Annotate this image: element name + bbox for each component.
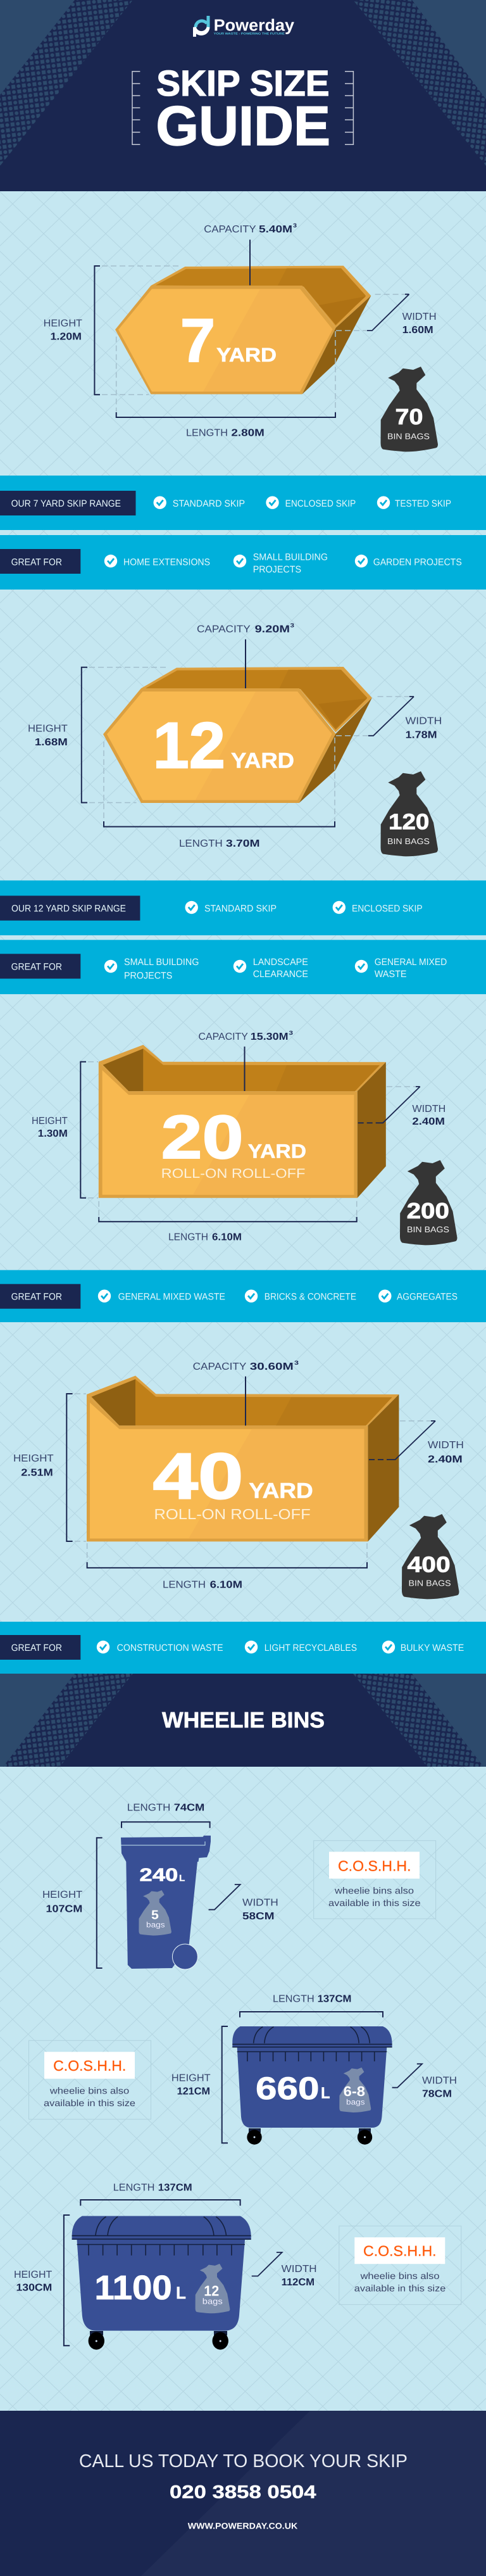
item: home extensions: HOME EXTENSIONS [123,557,210,568]
title [156,63,330,157]
height dimension: 2.51M [21,1468,53,1478]
length dimension [122,1802,210,1828]
panel: 7 yard skip [44,222,438,451]
item: landscape clearance [234,957,308,980]
item: standard skip [153,496,245,509]
icon: bin bag 120: 120 [389,810,429,835]
callout: COSHH: wheelie bins also [49,2087,129,2097]
skip size number: YARD [248,1140,306,1162]
icon: bag 12 bags [196,2264,230,2313]
phone number: 020 3858 0504 [170,2482,316,2503]
width dimension [209,1885,278,1922]
range label: OUR 7 YARD SKIP RANGE [11,498,121,509]
capacity label: CAPACITY [204,224,256,235]
width dimension: 58CM [242,1911,275,1922]
icon: bag 5 bags: bags [146,1920,165,1929]
item: enclosed skip: ENCLOSED SKIP [285,498,356,509]
item: tested skip: TESTED SKIP [395,498,451,509]
logo [195,15,295,37]
item: general mixed waste [355,957,447,980]
callout: COSHH: available in this size [328,1898,421,1909]
skip size number: ROLL-ON ROLL-OFF [161,1166,305,1181]
illustration: 1100 litre bin [72,2216,251,2350]
width dimension: 78CM [422,2088,452,2099]
height dimension: HEIGHT [14,2270,53,2280]
item: light recyclables: LIGHT RECYCLABLES [265,1643,357,1653]
length dimension: LENGTH [168,1232,208,1243]
capacity label: 3 [293,222,297,229]
icon: bin bag 70: BIN BAGS [387,432,430,441]
length dimension: 6.10M [212,1232,242,1243]
panel: 240 litre bin [42,1802,436,1969]
item: garden projects [355,555,462,568]
panel: 20 yard skip [32,1030,457,1245]
logo: Powerday [214,15,295,34]
width dimension [392,2064,457,2099]
item: small building projects: SMALL BUILDING [124,957,199,968]
capacity label: 30.60M [250,1361,294,1372]
panel: 1100 litre bin [14,2182,461,2350]
height dimension: 1.30M [38,1128,68,1139]
capacity label: 9.20M [255,624,290,635]
skip size number: YARD [216,344,277,366]
item: enclosed skip [333,901,423,914]
width dimension: WIDTH [412,1104,446,1114]
icon: bin bag 400: 400 [408,1553,451,1577]
range label [0,895,140,921]
great for label: GREAT FOR [11,962,62,973]
height dimension: HEIGHT [32,1116,68,1127]
illustration: 20 yard skip [99,1045,386,1198]
illustration: 240 litre bin [121,1836,211,1969]
icon: bin bag 400 [402,1514,459,1599]
item: bulky waste [382,1641,464,1653]
item: landscape clearance: LANDSCAPE [253,957,308,968]
capacity label: 3 [290,622,294,628]
width dimension: WIDTH [282,2264,317,2275]
item: general mixed waste: WASTE [375,969,407,980]
bar: 7 yard great for [0,535,486,590]
item: bulky waste: BULKY WASTE [401,1643,464,1653]
height dimension: HEIGHT [44,319,82,329]
callout: COSHH: available in this size [44,2099,135,2109]
callout: COSHH [339,2226,461,2304]
icon: bag 6-8 bags [339,2068,371,2112]
panel: header [0,0,486,191]
bar: 12 yard skip range [0,880,486,935]
icon: bag 6-8 bags: bags [346,2097,364,2106]
title: SKIP SIZE [156,63,330,104]
item: bricks and concrete [245,1289,356,1303]
bar: 40 yard great for [0,1622,486,1674]
great for label [0,1635,80,1660]
length dimension: LENGTH [113,2182,154,2193]
callout: COSHH: available in this size [354,2284,446,2294]
height dimension: 1.68M [35,737,68,748]
height dimension: 130CM [16,2283,52,2294]
illustration: 7 yard skip [115,266,371,394]
length dimension: LENGTH [163,1580,206,1591]
width dimension: 1.78M [406,729,437,741]
length dimension [116,331,335,438]
length dimension [80,2182,240,2206]
wheels [247,2128,372,2145]
item: standard skip [185,901,277,914]
panel: 660 litre bin [29,1994,457,2145]
length dimension: LENGTH [186,428,228,438]
length dimension: 2.80M [231,428,265,438]
item: landscape clearance: CLEARANCE [253,969,308,980]
capacity label [199,1030,293,1042]
height dimension [32,1062,98,1198]
callout: COSHH [29,2040,151,2119]
length dimension: 137CM [318,1994,351,2005]
height dimension: HEIGHT [13,1453,54,1464]
bar: 7 yard skip range [0,476,486,530]
length dimension: LENGTH [179,838,223,849]
capacity line [245,640,246,688]
item: small building projects: PROJECTS [124,970,172,982]
panel: 40 yard skip [13,1360,464,1599]
width dimension [336,697,442,741]
capacity text [139,1866,185,1886]
width dimension: 1.60M [402,325,433,336]
item: construction waste [97,1641,223,1653]
icon: bin bag 200: BIN BAGS [407,1225,449,1234]
skip size number: YARD [231,748,294,773]
great for label: GREAT FOR [11,1643,62,1653]
skip size number [161,1102,306,1181]
length dimension [240,1994,383,2017]
callout: COSHH: C.O.S.H.H. [363,2243,437,2259]
capacity text: L [176,2283,186,2302]
icon: bag 12 bags: 12 [204,2282,219,2299]
capacity text: 1100 [94,2269,172,2307]
skip size number: YARD [249,1479,313,1503]
icon: bin bag 70: 70 [395,405,423,429]
great for label [0,1284,80,1309]
callout: COSHH: C.O.S.H.H. [338,1857,411,1874]
callout: COSHH [314,1841,436,1919]
capacity label: 3 [294,1360,299,1366]
width dimension [336,294,437,336]
panel: footer [0,2411,486,2576]
icon: bag 5 bags: 5 [151,1909,159,1923]
height dimension: 1.20M [51,332,82,343]
item: bricks and concrete: BRICKS & CONCRETE [265,1292,356,1303]
callout: COSHH: C.O.S.H.H. [53,2057,126,2074]
width dimension [369,1421,464,1465]
width dimension: 112CM [282,2277,315,2288]
height dimension: 107CM [46,1904,82,1914]
icon: bin bag 70 [381,367,438,451]
icon: bin bag 200: 200 [407,1199,449,1223]
bar: 12 yard great for [0,940,486,994]
item: small building projects: PROJECTS [253,564,301,575]
height dimension [42,1838,103,1968]
width dimension [252,2252,317,2288]
callout: COSHH: wheelie bins also [334,1886,414,1897]
length dimension: 74CM [174,1802,204,1813]
call to action: CALL US TODAY TO BOOK YOUR SKIP [79,2451,408,2472]
height dimension [13,1394,86,1541]
capacity label [204,222,297,235]
title ruler brackets [132,72,353,144]
range label [0,491,135,515]
length dimension: LENGTH [273,1994,315,2005]
item: general mixed waste: GENERAL MIXED [375,957,447,968]
bar: 20 yard great for [0,1270,486,1322]
item: enclosed skip: ENCLOSED SKIP [352,903,423,914]
height dimension [28,667,169,803]
height dimension: HEIGHT [42,1890,83,1900]
capacity label: 5.40M [259,224,292,235]
item: home extensions [104,555,210,568]
length dimension [87,1543,367,1591]
capacity label [193,1360,299,1372]
height dimension: HEIGHT [171,2073,211,2084]
illustration: 12 yard skip [103,667,372,803]
logo: YOUR WASTE - POWERING THE FUTURE [214,32,285,35]
item: standard skip: STANDARD SKIP [204,903,277,914]
item: construction waste: CONSTRUCTION WASTE [117,1643,223,1653]
skip size number: 7 [180,306,215,375]
skip size number [153,1440,313,1522]
width dimension: 2.40M [412,1116,445,1127]
item: small building projects [104,957,199,982]
width dimension [358,1087,446,1127]
capacity line [249,239,251,285]
height dimension: HEIGHT [28,723,68,734]
capacity label: CAPACITY [193,1361,247,1372]
item: enclosed skip [266,496,356,509]
great for label: GREAT FOR [11,1292,62,1303]
heading: WHEELIE BINS [162,1708,325,1733]
item: aggregates [378,1289,458,1303]
icon: bin bag 120: BIN BAGS [387,837,430,846]
width dimension: 2.40M [428,1454,463,1465]
width dimension: WIDTH [422,2076,457,2087]
website: WWW.POWERDAY.CO.UK [188,2522,297,2531]
skip size number: ROLL-ON ROLL-OFF [154,1506,311,1522]
illustration: 40 yard skip [87,1375,399,1541]
panel: wheelie bins header [0,1674,486,1767]
height dimension [171,2026,228,2143]
skip size number: 12 [153,709,225,781]
icon: bag 5 bags [139,1890,171,1936]
length dimension: 137CM [158,2182,192,2193]
capacity text: 660 [256,2071,319,2106]
height dimension [44,266,180,395]
icon: bag 6-8 bags: 6-8 [344,2083,365,2099]
icon: bin bag 200 [400,1160,457,1245]
capacity text: L [321,2084,330,2102]
great for label: GREAT FOR [11,557,62,568]
height dimension: 121CM [177,2086,210,2097]
item: standard skip: STANDARD SKIP [173,498,245,509]
capacity label [197,622,294,635]
skip size number: 20 [161,1102,243,1171]
icon: bag 12 bags: bags [202,2297,223,2306]
item: small building projects [234,552,328,575]
item: small building projects: SMALL BUILDING [253,552,328,563]
range label: OUR 12 YARD SKIP RANGE [11,903,126,914]
capacity line [244,1047,246,1091]
callout: COSHH: wheelie bins also [359,2271,439,2282]
skip size number [180,306,277,375]
item: general mixed waste [98,1289,225,1303]
item: tested skip [377,496,451,509]
width dimension: WIDTH [402,312,437,322]
illustration: 660 litre bin [232,2026,392,2145]
panel: 12 yard skip [28,622,442,856]
capacity line [245,1377,246,1425]
icon: bin bag 400: BIN BAGS [409,1579,451,1588]
skip size number [153,709,294,781]
great for label [0,549,80,574]
length dimension: 6.10M [210,1580,242,1591]
length dimension: LENGTH [127,1802,170,1813]
capacity label: 3 [289,1030,293,1036]
capacity label: CAPACITY [197,624,251,635]
icon: bin bag 120 [381,771,438,856]
width dimension: WIDTH [406,716,442,727]
capacity text: 240 [139,1866,178,1886]
wheels [89,2331,228,2350]
item: aggregates: AGGREGATES [397,1292,458,1303]
capacity label: 15.30M [251,1032,289,1042]
skip size number: 40 [153,1440,243,1512]
height dimension [14,2215,70,2346]
item: light recyclables [245,1641,357,1653]
width dimension: WIDTH [242,1897,278,1908]
title: GUIDE [156,94,330,157]
great for label [0,954,80,979]
item: garden projects: GARDEN PROJECTS [373,557,462,568]
capacity label: CAPACITY [199,1032,248,1042]
item: general mixed waste: GENERAL MIXED WASTE [118,1292,225,1303]
length dimension [104,738,335,849]
width dimension: WIDTH [428,1440,464,1451]
length dimension: 3.70M [226,838,259,849]
capacity text: L [179,1873,185,1883]
length dimension [99,1201,357,1243]
